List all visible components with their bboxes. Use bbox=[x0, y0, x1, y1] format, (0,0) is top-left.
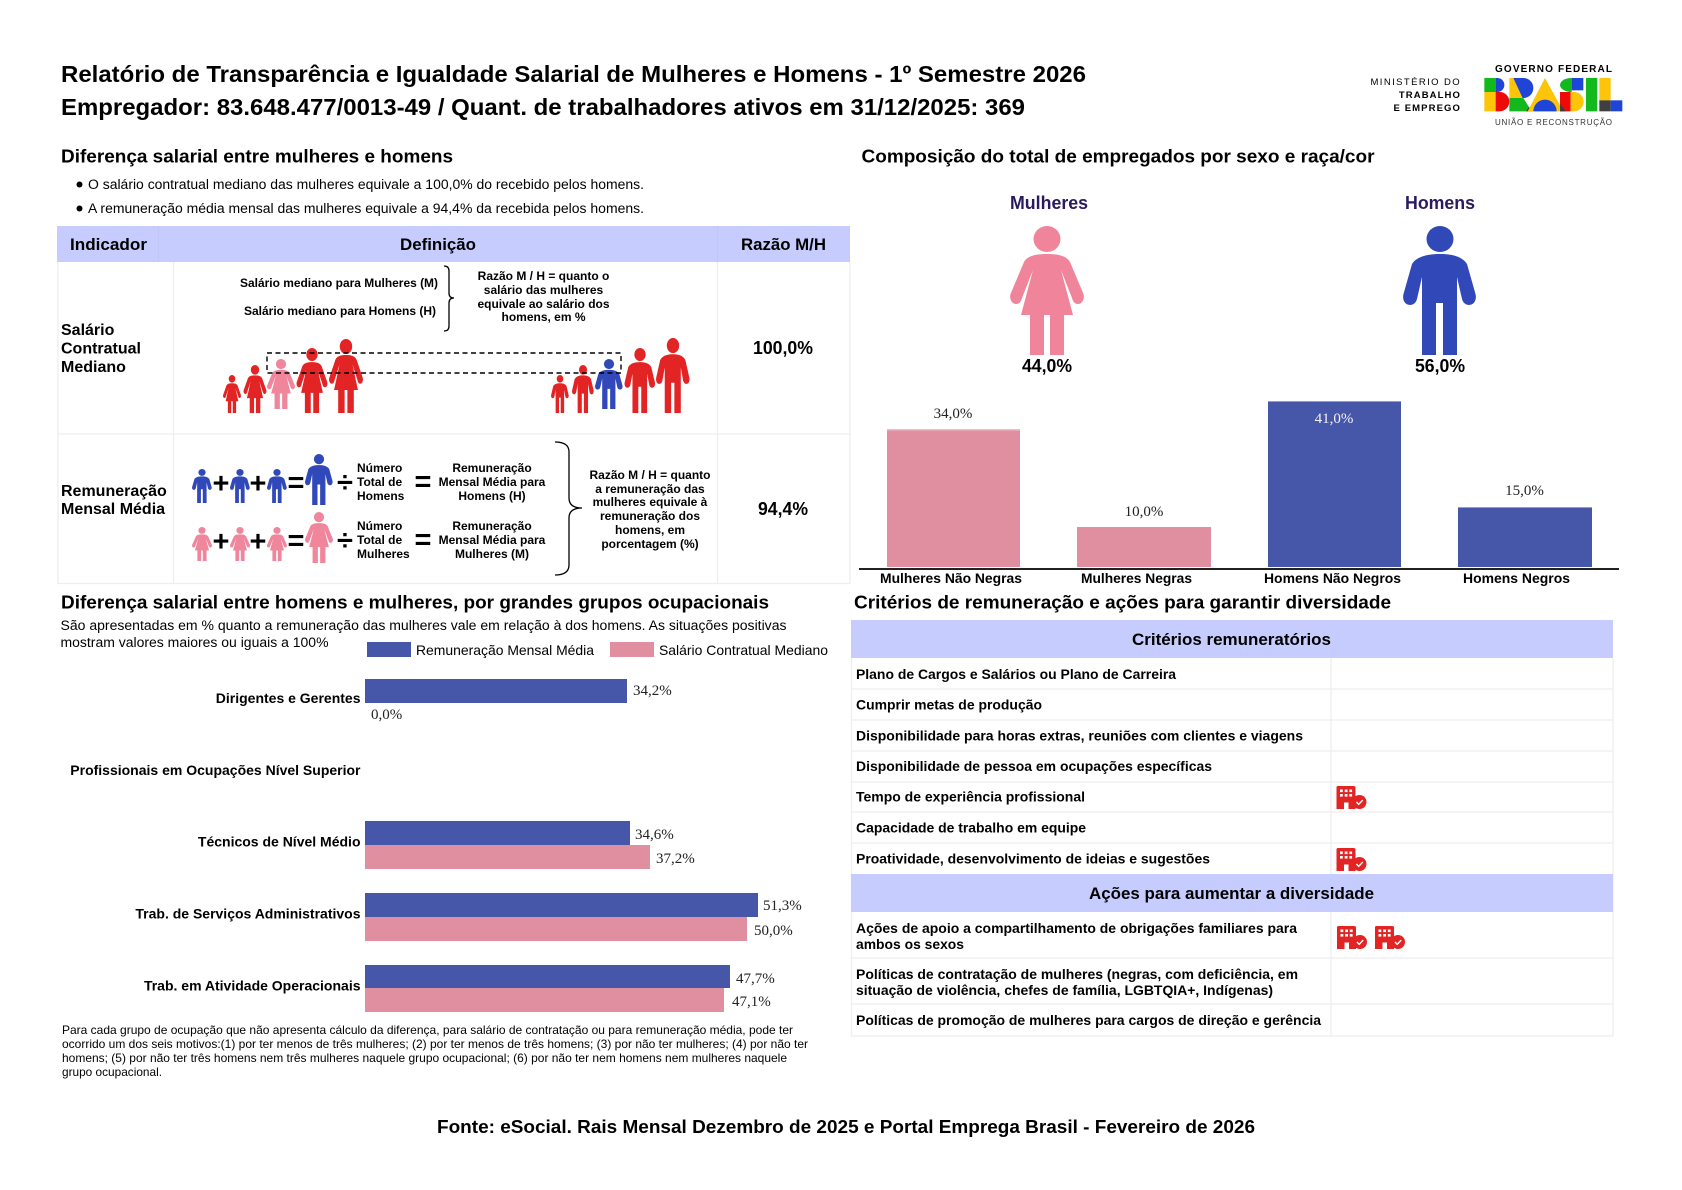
logo: Ministério do Trabalho e Emprego: MINISTÉRIO DO bbox=[1370, 77, 1461, 88]
bar chart: occupational groups bbox=[70, 679, 802, 1012]
formula: women: ÷ bbox=[337, 525, 353, 557]
bullet text block: A remuneração média mensal das mulheres equivale a 94,4% da recebida pelos homens. bbox=[88, 201, 644, 216]
panel: women share: 44,0% bbox=[1022, 356, 1072, 376]
panel: men share: Homens bbox=[1405, 193, 1475, 213]
footnote: ocorrido um dos seis motivos:(1) por ter menos de três mulheres; (2) por ter menos de três homens; (3) por não ter mulheres; (4) por não ter bbox=[62, 1037, 808, 1051]
row label: remuneração mensal média bbox=[61, 483, 167, 518]
panel: women share: Mulheres bbox=[1010, 193, 1088, 213]
formula: men: Homens (H) bbox=[458, 489, 526, 503]
definition: razão explanation: salário das mulheres bbox=[484, 283, 604, 297]
action rows: ambos os sexos bbox=[856, 937, 964, 952]
logo: Ministério do Trabalho e Emprego: E EMPREGO bbox=[1394, 103, 1461, 114]
heading: diferença salarial: Diferença salarial entre mulheres e homens bbox=[61, 146, 453, 166]
value labels bbox=[371, 683, 802, 1010]
formula: women bbox=[192, 512, 546, 563]
criteria rows: Capacidade de trabalho em equipe bbox=[856, 820, 1087, 836]
definition: razão explanation: Razão M / H = quanto o bbox=[478, 269, 609, 283]
footnote: grupo ocupacional. bbox=[62, 1065, 162, 1079]
formula: women: Remuneração bbox=[452, 519, 532, 533]
legend bbox=[367, 642, 828, 658]
definition: razão explanation: homens, em % bbox=[501, 310, 586, 324]
category labels: Trab. de Serviços Administrativos bbox=[135, 906, 361, 922]
logo: Governo Federal Brasil: UNIÃO E RECONSTRUÇÃO bbox=[1495, 118, 1612, 127]
criteria rows bbox=[856, 667, 1303, 866]
value labels: 34,6% bbox=[635, 827, 674, 843]
row label: salário contratual mediano: Salário bbox=[61, 322, 115, 339]
formula: women: Total de bbox=[357, 533, 402, 547]
formula: men: ÷ bbox=[337, 467, 353, 499]
action rows: Ações de apoio a compartilhamento de obrigações familiares para bbox=[856, 921, 1298, 936]
panel: indicator table bbox=[57, 226, 850, 584]
category labels bbox=[70, 690, 361, 994]
row label: salário contratual mediano: Mediano bbox=[61, 359, 126, 376]
large brace and razão explanation: a remuneração das bbox=[595, 482, 705, 496]
description text: São apresentadas em % quanto a remuneração das mulheres vale em relação à dos homens. As situações positivas bbox=[60, 618, 787, 633]
heading: critérios: Critérios de remuneração e ações para garantir diversidade bbox=[854, 592, 1391, 612]
header: ações bbox=[851, 874, 1613, 912]
median dashed box bbox=[267, 353, 621, 373]
logo: Governo Federal Brasil bbox=[1484, 64, 1622, 127]
footnote: homens; (5) por não ter três homens nem três mulheres naquele grupo ocupacional; (6) por não ter nem homens nem mulheres naquele bbox=[62, 1051, 787, 1065]
bar chart: composition by sex and race: 34,0% bbox=[934, 406, 972, 422]
formula: women: = bbox=[415, 524, 431, 556]
formula: men: + bbox=[250, 468, 266, 500]
definition: salário mediano labels: Salário mediano para Mulheres (M) bbox=[240, 276, 438, 290]
value labels: 34,2% bbox=[633, 683, 672, 699]
icon: company tempo de experiência bbox=[1336, 786, 1366, 809]
criteria rows: Disponibilidade de pessoa em ocupações específicas bbox=[856, 759, 1212, 774]
formula: men: Mensal Média para bbox=[439, 475, 546, 489]
icon: women line-up bbox=[223, 339, 363, 413]
formula: men: Remuneração bbox=[452, 461, 532, 475]
table header: Definição bbox=[400, 235, 476, 254]
value labels: 37,2% bbox=[656, 851, 695, 867]
salário bars bbox=[365, 845, 747, 1012]
formula: women: + bbox=[213, 526, 229, 558]
table header bbox=[57, 226, 850, 262]
formula: men: Total de bbox=[357, 475, 402, 489]
formula: women: Mulheres (M) bbox=[455, 547, 529, 561]
large brace and razão explanation bbox=[555, 442, 711, 575]
bar chart: composition by sex and race: Homens Negros bbox=[1463, 570, 1570, 586]
panel: men share bbox=[1403, 193, 1476, 376]
title: Empregador: 83.648.477/0013-49 / Quant. de trabalhadores ativos em 31/12/2025: 369 bbox=[61, 94, 1025, 120]
header: critérios remuneratórios: Critérios remuneratórios bbox=[1132, 630, 1331, 649]
definition: salário mediano labels: Salário mediano para Homens (H) bbox=[244, 304, 436, 318]
bullet text block: O salário contratual mediano das mulheres equivale a 100,0% do recebido pelos homens. bbox=[88, 177, 644, 192]
bar chart: composition by sex and race bbox=[859, 401, 1619, 586]
value labels: 47,7% bbox=[736, 971, 775, 987]
legend: Remuneração Mensal Média bbox=[416, 642, 594, 658]
legend: Salário Contratual Mediano bbox=[659, 642, 828, 658]
title bbox=[61, 61, 1086, 120]
value: remuneração 94,4%: 94,4% bbox=[758, 499, 808, 519]
large brace and razão explanation: remuneração dos bbox=[600, 509, 700, 523]
row label: remuneração mensal média: Remuneração bbox=[61, 483, 167, 500]
action rows: Políticas de promoção de mulheres para cargos de direção e gerência bbox=[856, 1013, 1321, 1028]
formula: men: Homens bbox=[357, 489, 405, 503]
definition: razão explanation bbox=[477, 269, 610, 324]
formula: men: Número bbox=[357, 461, 402, 475]
remuneração bars bbox=[365, 679, 758, 988]
formula: women: = bbox=[288, 525, 304, 557]
logo: Governo Federal Brasil: GOVERNO FEDERAL bbox=[1495, 64, 1612, 75]
value labels: 51,3% bbox=[763, 898, 802, 914]
formula: women: Número bbox=[357, 519, 402, 533]
formula: men: = bbox=[288, 467, 304, 499]
action rows bbox=[856, 921, 1321, 1028]
criteria rows: Tempo de experiência profissional bbox=[856, 790, 1085, 804]
icon: company proatividade bbox=[1336, 848, 1366, 871]
formula: women: Mensal Média para bbox=[439, 533, 546, 547]
title: Relatório de Transparência e Igualdade Salarial de Mulheres e Homens - 1º Semestre 2026 bbox=[61, 61, 1086, 87]
source footer: Fonte: eSocial. Rais Mensal Dezembro de 2025 e Portal Emprega Brasil - Fevereiro de 2026 bbox=[437, 1117, 1255, 1137]
formula: women: Mulheres bbox=[357, 547, 410, 561]
formula: women: + bbox=[250, 526, 266, 558]
large brace and razão explanation: homens, em bbox=[615, 523, 685, 537]
heading: composição: Composição do total de empregados por sexo e raça/cor bbox=[862, 146, 1374, 166]
bar chart: composition by sex and race: 41,0% bbox=[1315, 411, 1353, 427]
description text bbox=[60, 618, 787, 650]
panel: criteria table bbox=[851, 620, 1613, 1036]
large brace and razão explanation: Razão M / H = quanto bbox=[589, 468, 711, 482]
category labels: Técnicos de Nível Médio bbox=[198, 834, 360, 850]
bar chart: composition by sex and race: 10,0% bbox=[1125, 504, 1163, 520]
footnote: Para cada grupo de ocupação que não apresenta cálculo da diferença, para salário de contratação ou para remuneração média, pode ter bbox=[62, 1023, 793, 1037]
icons: companies ações de apoio bbox=[1337, 926, 1405, 949]
action rows: Políticas de contratação de mulheres (negras, com deficiência, em bbox=[856, 967, 1298, 982]
row label: salário contratual mediano bbox=[61, 322, 141, 376]
value: salário 100,0%: 100,0% bbox=[753, 338, 813, 358]
header: critérios remuneratórios bbox=[851, 620, 1613, 658]
bullet text block bbox=[76, 177, 644, 216]
bar chart: composition by sex and race: Mulheres Negras bbox=[1081, 570, 1192, 586]
icon: men line-up bbox=[551, 338, 689, 413]
value labels: 47,1% bbox=[732, 994, 771, 1010]
icon: woman bbox=[1010, 226, 1084, 355]
bar chart: composition by sex and race: Homens Não Negros bbox=[1264, 570, 1401, 586]
description text: mostram valores maiores ou iguais a 100% bbox=[60, 635, 328, 650]
formula: men: + bbox=[213, 468, 229, 500]
footnote bbox=[62, 1023, 808, 1079]
category labels: Dirigentes e Gerentes bbox=[216, 690, 361, 706]
value labels: 0,0% bbox=[371, 707, 402, 723]
criteria rows: Plano de Cargos e Salários ou Plano de Carreira bbox=[856, 667, 1177, 682]
row label: salário contratual mediano: Contratual bbox=[61, 340, 141, 358]
definition: salário mediano labels bbox=[240, 266, 454, 331]
large brace and razão explanation: porcentagem (%) bbox=[601, 537, 699, 551]
panel: men share: 56,0% bbox=[1415, 356, 1465, 376]
panel: women share bbox=[1010, 193, 1088, 376]
formula: men bbox=[192, 454, 546, 505]
logo: Ministério do Trabalho e Emprego: TRABALHO bbox=[1399, 90, 1461, 101]
header: ações: Ações para aumentar a diversidade bbox=[1089, 884, 1374, 903]
criteria rows: Cumprir metas de produção bbox=[856, 698, 1042, 712]
category labels: Trab. em Atividade Operacionais bbox=[144, 978, 361, 994]
definition: razão explanation: equivale ao salário dos bbox=[477, 297, 610, 311]
heading: grupos ocupacionais: Diferença salarial entre homens e mulheres, por grandes grupos ocupacionais bbox=[61, 592, 769, 612]
formula: men: = bbox=[415, 466, 431, 498]
row label: remuneração mensal média: Mensal Média bbox=[61, 501, 165, 518]
bar chart: composition by sex and race: 15,0% bbox=[1505, 483, 1544, 499]
table header: Indicador bbox=[70, 235, 147, 254]
value labels: 50,0% bbox=[754, 923, 793, 939]
category labels: Profissionais em Ocupações Nível Superior bbox=[70, 762, 361, 778]
action rows: situação de violência, chefes de família, LGBTQIA+, Indígenas) bbox=[856, 983, 1273, 998]
bar chart: composition by sex and race: Mulheres Não Negras bbox=[880, 570, 1022, 586]
icon: man bbox=[1403, 226, 1476, 355]
logo: Ministério do Trabalho e Emprego bbox=[1370, 77, 1461, 114]
criteria rows: Disponibilidade para horas extras, reuniões com clientes e viagens bbox=[856, 728, 1303, 744]
table header: Razão M/H bbox=[741, 235, 826, 254]
criteria rows: Proatividade, desenvolvimento de ideias e sugestões bbox=[856, 852, 1210, 866]
large brace and razão explanation: mulheres equivale à bbox=[593, 495, 708, 509]
